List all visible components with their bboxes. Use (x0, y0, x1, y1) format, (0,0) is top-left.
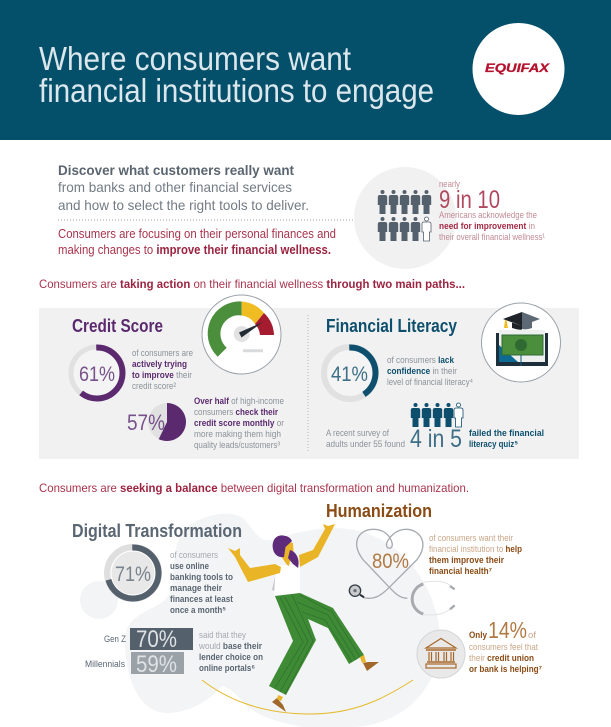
panel heading: Credit Score: Credit Score (72, 316, 163, 336)
text: 57% (194, 396, 284, 451)
intro text: Consumers are focusing on their personal finances and (58, 227, 336, 241)
text: 57%: more making them high (194, 429, 281, 440)
text: 41%: of consumers lack (387, 355, 455, 366)
text: 57%: consumers check their (194, 407, 278, 418)
icon: bank (417, 630, 465, 678)
stat: 9 in 10: 9 in 10 (439, 186, 500, 214)
panel: digital transformation (72, 521, 263, 678)
stat: 80%: 80% (372, 550, 409, 573)
intro text (58, 162, 354, 257)
text: 71%: of consumers (170, 550, 218, 561)
header band (0, 0, 611, 140)
text: 14% (469, 617, 542, 675)
text: 80% (429, 533, 522, 577)
text: 4 in 5: adults under 55 found (326, 439, 405, 450)
icon: graduation cap and money book (482, 303, 560, 382)
text: 4 in 5: literacy quiz⁵ (469, 439, 518, 450)
text: 41%: confidence in their (387, 366, 457, 377)
pie: 57% (127, 403, 186, 441)
text: 14%: consumers feel that (469, 642, 538, 653)
text: 61%: to improve their (132, 370, 192, 381)
bar chart: Gen Z and Millennials: 70% (136, 626, 177, 653)
text: 71%: finances at least (170, 594, 234, 605)
text: 80%: financial institution to help (429, 544, 522, 555)
text: 4 in 5: 4 in 5 (410, 425, 462, 453)
text: lender choice: would base their (198, 641, 262, 652)
illustration: balancing woman (228, 524, 379, 712)
intro text: Discover what customers really want (58, 162, 294, 178)
text: 57%: credit score monthly or (194, 418, 284, 429)
donut: 71% (107, 547, 159, 599)
tightrope (202, 680, 413, 714)
text: 57%: Over half of high-income (194, 396, 284, 407)
text: 14%: of (528, 630, 536, 641)
text: 14%: or bank is helping⁷ (469, 664, 542, 675)
title: financial institutions to engage (39, 72, 434, 109)
donut: 71%: 71% (115, 563, 151, 586)
logo: Equifax (472, 23, 564, 115)
text: 71%: once a month⁵ (170, 605, 226, 616)
intro text: from banks and other financial services (58, 179, 292, 195)
text: 61%: actively trying (132, 359, 187, 370)
bar chart: Gen Z and Millennials: 59% (136, 651, 177, 678)
text: lender choice: said that they (199, 630, 246, 641)
bar chart: Gen Z and Millennials (85, 626, 193, 678)
panel: humanization: Humanization (326, 501, 432, 521)
text: lender choice: lender choice on (199, 652, 263, 663)
stat: 9 in 10: need for improvement in (439, 221, 535, 232)
intro text: making changes to improve their financial wellness. (58, 243, 331, 257)
panel heading: Financial Literacy: Financial Literacy (326, 316, 457, 336)
text: 80%: them improve their (429, 555, 504, 566)
text: 4 in 5: failed the financial (469, 428, 544, 439)
panel: digital transformation: Digital Transformation (72, 521, 242, 541)
title: Where consumers want (39, 40, 351, 77)
stat: 9 in 10: Americans acknowledge the (439, 210, 537, 221)
text: 61%: credit score² (132, 381, 176, 392)
bar chart: Gen Z and Millennials: Gen Z (104, 634, 126, 645)
text: 57%: quality leads/customers³ (194, 440, 280, 451)
text: 71% (170, 550, 234, 616)
text: 41%: level of financial literacy⁴ (387, 377, 473, 388)
donut: 61% (71, 347, 123, 399)
intro text: and how to select the right tools to deliver. (58, 197, 309, 213)
text: lender choice: online portals⁶ (199, 663, 255, 674)
bar chart: Gen Z and Millennials: Millennials (85, 659, 125, 670)
logo: Equifax: EQUIFAX (485, 61, 550, 75)
heading: seeking a balance: Consumers are seeking a balance between digital transformation and humanization. (39, 481, 469, 495)
text: 71%: use online (170, 561, 209, 572)
icon: credit score gauge (202, 295, 281, 374)
icon: stethoscope heart (349, 529, 455, 615)
stat: 9 in 10 (354, 167, 545, 269)
icon: four of five people (411, 403, 463, 427)
donut: 61%: 61% (79, 363, 115, 386)
text: 14%: Only (469, 630, 488, 641)
text: 14%: 14% (488, 617, 527, 643)
donut: 41%: 41% (331, 363, 368, 386)
icon: nine of ten people (378, 190, 431, 241)
pie: 57%: 57% (127, 410, 165, 435)
text: lender choice (198, 630, 263, 674)
panel: two paths (39, 295, 579, 459)
text: 14%: their credit union (469, 653, 534, 664)
panel: humanization (326, 501, 542, 678)
background blob (80, 514, 440, 727)
text: 71%: manage their (170, 583, 222, 594)
text: 4 in 5: A recent survey of (326, 428, 389, 439)
stat: 9 in 10: their overall financial wellness¹ (439, 232, 545, 243)
text: 61%: of consumers are (132, 348, 193, 359)
text: 4 in 5 (326, 425, 544, 453)
stat: 9 in 10: nearly (439, 179, 460, 190)
donut: 41% (324, 347, 376, 399)
title (39, 40, 434, 109)
text: 80%: financial health⁷ (429, 566, 492, 577)
text: 71%: banking tools to (170, 572, 233, 583)
heading: two main paths: Consumers are taking action on their financial wellness through two main paths... (39, 277, 465, 291)
text: 61% (132, 348, 193, 392)
text: 41% (387, 355, 473, 388)
text: 80%: of consumers want their (429, 533, 513, 544)
